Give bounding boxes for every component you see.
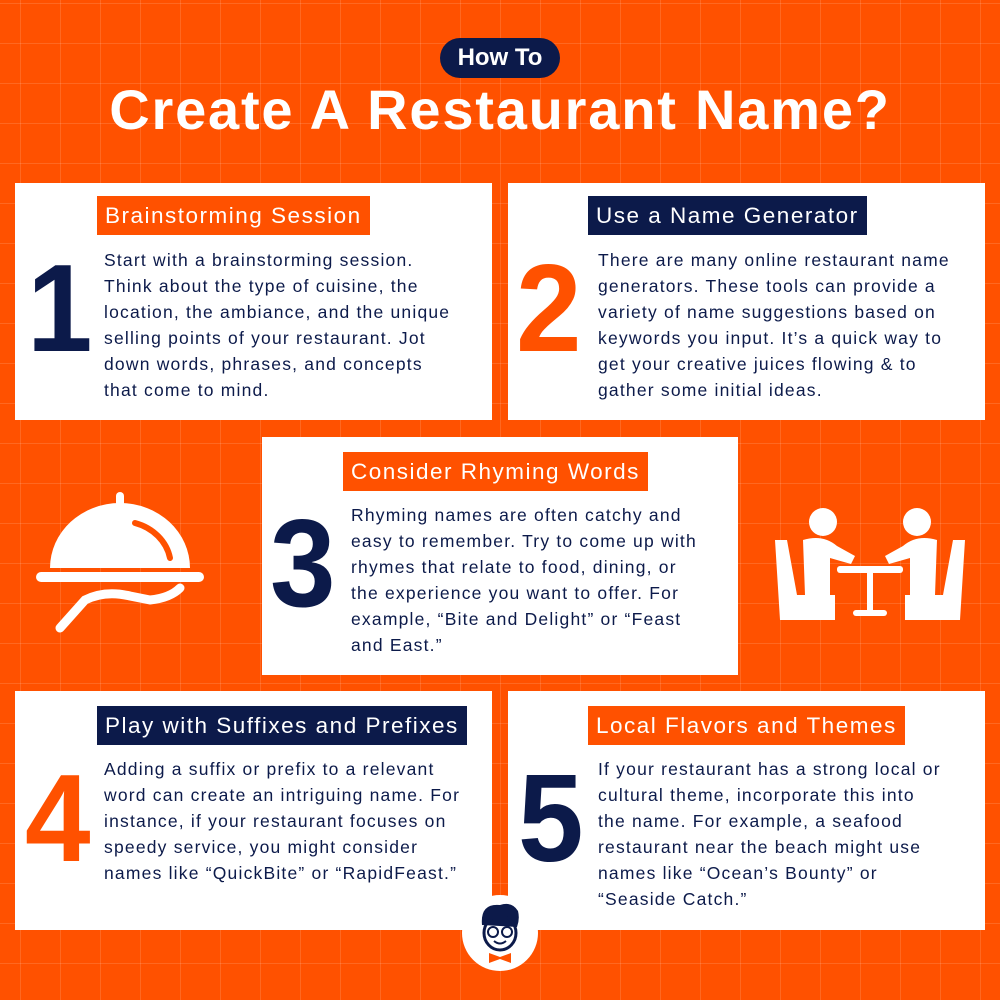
- text 4: speedy service, you might consider: [104, 837, 418, 857]
- icon: dining couple: [775, 508, 965, 620]
- text 2: There are many online restaurant name: [598, 250, 950, 270]
- text 5: cultural theme, incorporate this into: [598, 785, 915, 805]
- text 3: example, “Bite and Delight” or “Feast: [351, 609, 681, 629]
- text 1: selling points of your restaurant. Jot: [104, 328, 426, 348]
- text 5: names like “Ocean’s Bounty” or: [598, 863, 878, 883]
- text 5: If your restaurant has a strong local or: [598, 759, 941, 779]
- title: Create A Restaurant Name?: [109, 78, 891, 141]
- text 3: rhymes that relate to food, dining, or: [351, 557, 677, 577]
- text 1: down words, phrases, and concepts: [104, 354, 423, 374]
- panel: step 3: [262, 437, 738, 675]
- heading 2: Use a Name Generator: [596, 203, 859, 228]
- number 5: 5: [518, 750, 584, 888]
- heading 1: Brainstorming Session: [105, 203, 362, 228]
- heading 3: Consider Rhyming Words: [351, 459, 640, 484]
- number 4: 4: [25, 750, 91, 888]
- heading 4: Play with Suffixes and Prefixes: [105, 713, 459, 738]
- icon: cloche: [36, 492, 204, 632]
- text 5: “Seaside Catch.”: [598, 889, 748, 909]
- text 5: the name. For example, a seafood: [598, 811, 903, 831]
- text 4: [104, 759, 460, 883]
- text 3: and East.”: [351, 635, 443, 655]
- panel: step 1: [15, 183, 492, 420]
- panel: step 4: [15, 691, 492, 930]
- text 2: variety of name suggestions based on: [598, 302, 936, 322]
- text 2: keywords you input. It’s a quick way to: [598, 328, 942, 348]
- number 2: 2: [516, 240, 582, 378]
- text 1: Start with a brainstorming session.: [104, 250, 413, 270]
- text 4: Adding a suffix or prefix to a relevant: [104, 759, 435, 779]
- text 3: Rhyming names are often catchy and: [351, 505, 682, 525]
- pill: How To: How To: [458, 44, 542, 71]
- text 1: [104, 250, 450, 400]
- heading 4: [97, 706, 467, 745]
- panel: step 2: [508, 183, 985, 420]
- text 5: [598, 759, 941, 909]
- heading 5: Local Flavors and Themes: [596, 713, 897, 738]
- heading 5: [588, 706, 905, 745]
- number 1: 1: [27, 240, 93, 378]
- text 5: restaurant near the beach might use: [598, 837, 921, 857]
- text 3: easy to remember. Try to come up with: [351, 531, 697, 551]
- heading 2: [588, 196, 867, 235]
- text 2: gather some initial ideas.: [598, 380, 823, 400]
- text 4: names like “QuickBite” or “RapidFeast.”: [104, 863, 457, 883]
- logo: mascot: [462, 895, 538, 971]
- text 2: [598, 250, 950, 400]
- number 3: 3: [270, 495, 336, 633]
- text 4: word can create an intriguing name. For: [104, 785, 460, 805]
- heading 3: [343, 452, 648, 491]
- text 4: instance, if your restaurant focuses on: [104, 811, 447, 831]
- panel: step 5: [508, 691, 985, 930]
- text 1: Think about the type of cuisine, the: [104, 276, 419, 296]
- pill: How To: [440, 38, 560, 78]
- heading 1: [97, 196, 370, 235]
- text 2: generators. These tools can provide a: [598, 276, 936, 296]
- text 3: [351, 505, 697, 655]
- text 1: location, the ambiance, and the unique: [104, 302, 450, 322]
- text 2: get your creative juices flowing & to: [598, 354, 917, 374]
- text 3: the experience you want to offer. For: [351, 583, 679, 603]
- text 1: that come to mind.: [104, 380, 270, 400]
